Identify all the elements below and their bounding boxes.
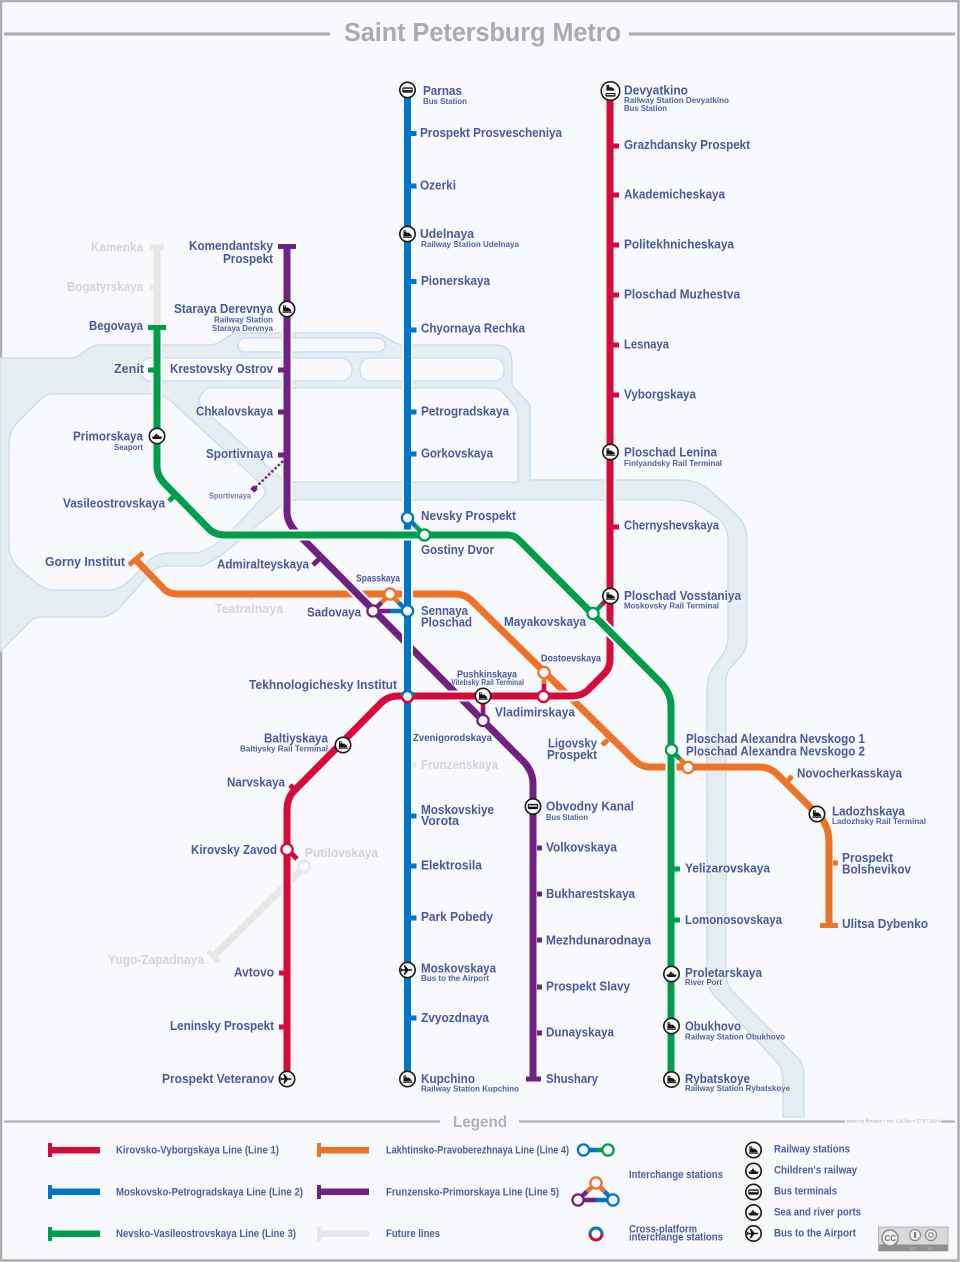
line 5 purple [252,246,542,1079]
Parnas: Parnas [423,84,462,98]
Sadovaya: Sadovaya [307,606,362,620]
line 3 green [148,328,680,1079]
creative commons badge: CC [884,1234,896,1243]
Ploschad Alexandra Nevskogo: Ploschad Alexandra Nevskogo 1 [686,732,865,746]
Moskovskiye Vorota: Moskovskiye [421,803,494,817]
Pushkinskaya: Pushkinskaya [457,670,517,680]
Prospekt Slavy: Prospekt Slavy [546,980,630,994]
Frunzenskaya: Frunzenskaya [421,758,499,772]
Zvyozdnaya: Zvyozdnaya [421,1011,490,1025]
Ligovsky Prospekt: Ligovsky [548,736,597,750]
station labels: line 5 [170,239,652,1086]
Moskovskiye Vorota: Vorota [421,814,460,828]
legend: bus to the airport: Bus to the Airport [774,1228,856,1240]
Kamenka: Kamenka [91,240,144,254]
credit: made by florstein • rev. 1.9.3en • 27.07.2024 [846,1118,941,1124]
title: Saint Petersburg Metro [344,19,621,47]
creative commons badge [878,1227,948,1251]
creative commons badge: SA [927,1246,934,1251]
Zvenigorodskaya: Zvenigorodskaya [413,733,492,744]
Gostiny Dvor: Gostiny Dvor [421,543,494,557]
Ploschad Muzhestva: Ploschad Muzhestva [624,288,741,302]
Chyornaya Rechka: Chyornaya Rechka [421,322,526,336]
Ladozhskaya: Ladozhskaya [832,804,906,818]
Obvodny Kanal [546,800,634,822]
Bukharestskaya: Bukharestskaya [546,887,636,901]
Kirovsky Zavod: Kirovsky Zavod [191,843,277,857]
Putilovskaya: Putilovskaya [305,846,379,860]
Parnas: Bus Station [423,96,467,106]
Gorkovskaya: Gorkovskaya [421,446,494,460]
Ploschad Alexandra Nevskogo: Ploschad Alexandra Nevskogo 2 [686,744,865,758]
Novocherkasskaya: Novocherkasskaya [797,766,903,780]
Obukhovo: Railway Station Obukhovo [685,1032,785,1042]
key: line 3 [48,1227,296,1241]
Sportivnaya exit: Sportivnaya [209,490,251,500]
Udelnaya: Udelnaya [420,227,475,241]
Gorny Institut: Gorny Institut [45,555,126,569]
Dostoevskaya: Dostoevskaya [541,654,601,664]
interchange connectors [373,518,688,767]
Mayakovskaya: Mayakovskaya [504,615,587,629]
Sennaya Ploschad: Sennaya [421,604,469,618]
legend: bus to the airport [746,1226,856,1241]
key: line 5: Frunzensko-Primorskaya Line (Line 5) [386,1186,559,1198]
Obukhovo [685,1020,785,1042]
Ploschad Lenina [624,446,722,468]
Vyborgskaya: Vyborgskaya [624,388,697,402]
Ulitsa Dybenko: Ulitsa Dybenko [842,917,928,931]
Tekhnologichesky Institut: Tekhnologichesky Institut [249,678,398,692]
Elektrosila: Elektrosila [421,858,483,872]
Leninsky Prospekt: Leninsky Prospekt [170,1019,275,1033]
legend: sea and river ports [746,1205,861,1220]
Pushkinskaya [451,670,524,687]
legend: interchange label: Interchange stations [629,1169,723,1181]
Obvodny Kanal: Obvodny Kanal [546,800,634,814]
Politekhnicheskaya: Politekhnicheskaya [624,238,735,252]
Baltiyskaya [240,732,329,754]
Ploschad Vosstaniya [624,589,742,610]
creative commons badge: BY [910,1246,916,1251]
station labels: line 1 [108,84,751,1086]
Ploschad Lenina: Finlyandsky Rail Terminal [624,458,722,468]
Yugo-Zapadnaya: Yugo-Zapadnaya [108,953,205,967]
Vasileostrovskaya: Vasileostrovskaya [63,496,166,510]
Park Pobedy: Park Pobedy [421,910,493,924]
legend: children's railway [746,1163,858,1179]
Volkovskaya: Volkovskaya [546,840,618,854]
Ploschad Lenina: Ploschad Lenina [624,446,718,460]
legend: children's railway: Children's railway [774,1164,858,1176]
key: line 2: Moskovsko-Petrogradskaya Line (Line 2) [116,1186,303,1198]
Ozerki: Ozerki [420,178,456,192]
line 2 blue [408,92,416,1079]
Pionerskaya: Pionerskaya [421,274,491,288]
Vladimirskaya: Vladimirskaya [495,706,576,720]
Avtovo: Avtovo [234,966,274,980]
key: line 1: Kirovsko-Vyborgskaya Line (Line 1) [116,1144,279,1156]
Devyatkino: Bus Station [624,103,667,113]
future lines [150,247,416,962]
Rybatskoye: Rybatskoye [685,1072,750,1086]
Sportivnaya: Sportivnaya [206,447,274,461]
key: line 4: Lakhtinsko-Pravoberezhnaya Line (Line 4) [386,1144,569,1156]
Grazhdansky Prospekt: Grazhdansky Prospekt [624,138,751,152]
Obukhovo: Obukhovo [685,1020,741,1034]
Ligovsky Prospekt: Prospekt [547,748,598,762]
Staraya Derevnya: Staraya Dervnya [212,323,273,333]
Zenit: Zenit [114,362,145,376]
Komendantsky Prospekt: Prospekt [223,252,274,266]
Parnas [423,84,467,106]
line 4 orange [129,553,838,926]
legend: line keys [48,1143,569,1241]
legend: cross-platform station [590,1228,602,1240]
Krestovsky Ostrov: Krestovsky Ostrov [170,362,273,376]
key: line 2 [48,1185,303,1199]
Komendantsky Prospekt: Komendantsky [189,239,273,253]
Udelnaya: Railway Station Udelnaya [421,239,519,249]
key: line 1 [48,1143,279,1157]
Chkalovskaya: Chkalovskaya [196,404,274,418]
Primorskaya: Primorskaya [73,430,144,444]
Spasskaya: Spasskaya [356,574,400,584]
legend: railway stations [746,1142,850,1158]
station labels: line 4 [45,555,928,931]
Chernyshevskaya: Chernyshevskaya [624,518,720,532]
Staraya Derevnya: Railway Station [214,314,273,324]
key: line 5 [317,1185,559,1199]
station labels: line 3 [63,240,865,1093]
key: future lines [317,1227,440,1241]
Prospekt Bolshevikov [842,851,911,876]
legend: railway stations: Railway stations [774,1144,850,1156]
Ladozhskaya: Ladozhsky Rail Terminal [832,816,926,826]
Moskovskiye Vorota [421,803,494,828]
Prospekt Prosvescheniya: Prospekt Prosvescheniya [420,126,563,140]
Prospekt Veteranov: Prospekt Veteranov [162,1072,274,1086]
Ladozhskaya [832,804,926,826]
legend: cross-platform label: Cross-platform [629,1224,697,1236]
Sennaya Ploschad: Ploschad [421,616,472,630]
line 1 red [279,92,619,1079]
Yelizarovskaya: Yelizarovskaya [685,862,771,876]
Pushkinskaya: Vitebsky Rail Terminal [451,677,524,687]
Baltiyskaya: Baltiysky Rail Terminal [240,744,328,754]
Devyatkino: Railway Station Devyatkino [624,95,729,105]
Primorskaya: Seaport [114,442,143,452]
Proletarskaya: Proletarskaya [685,966,763,980]
Shushary: Shushary [546,1072,598,1086]
Staraya Derevnya: Staraya Derevnya [174,302,274,316]
Primorskaya [73,430,144,452]
Staraya Derevnya [174,302,274,333]
legend: two-station interchange [578,1144,614,1156]
key: future lines: Future lines [386,1228,440,1240]
legend: bus terminals [746,1184,837,1200]
Akademicheskaya: Akademicheskaya [624,188,726,202]
Moskovskaya [421,962,497,983]
Proletarskaya [685,966,763,987]
station labels: line 2 [413,84,563,1094]
legend: bus terminals: Bus terminals [774,1186,837,1198]
Admiralteyskaya: Admiralteyskaya [217,558,310,572]
Narvskaya: Narvskaya [227,776,286,790]
Baltiyskaya: Baltiyskaya [264,732,329,746]
Petrogradskaya: Petrogradskaya [421,404,510,418]
Ligovsky Prospekt [547,736,598,762]
Komendantsky Prospekt [189,239,274,266]
Ploschad Vosstaniya: Moskovsky Rail Terminal [624,600,719,610]
Kupchino: Railway Station Kupchino [421,1084,519,1094]
station markers [149,82,825,1087]
key: line 4 [317,1143,569,1157]
Udelnaya [420,227,519,249]
Lesnaya: Lesnaya [624,338,670,352]
Prospekt Bolshevikov: Bolshevikov [842,862,911,876]
Devyatkino: Devyatkino [624,84,688,98]
legend: sea and river ports: Sea and river ports [774,1206,861,1218]
Mezhdunarodnaya: Mezhdunarodnaya [546,934,652,948]
title rule right [629,32,955,36]
Lomonosovskaya: Lomonosovskaya [685,913,783,927]
map: water and islands [0,333,804,1117]
Kupchino [421,1072,519,1094]
Teatralnaya: Teatralnaya [215,602,284,616]
Begovaya: Begovaya [89,319,144,333]
Bogatyrskaya: Bogatyrskaya [67,280,144,294]
Dunayskaya: Dunayskaya [546,1026,615,1040]
Devyatkino [624,84,729,113]
Sennaya Ploschad [421,604,472,630]
Proletarskaya: River Port [685,977,722,987]
Prospekt Bolshevikov: Prospekt [842,851,894,865]
Nevsky Prospekt: Nevsky Prospekt [421,509,517,523]
legend: cross-platform label [629,1224,723,1244]
Kupchino: Kupchino [421,1072,475,1086]
legend: three-station interchange [572,1177,619,1206]
legend: cross-platform label: interchange stations [629,1232,723,1244]
Ploschad Vosstaniya: Ploschad Vosstaniya [624,589,742,603]
Rybatskoye [685,1072,790,1093]
Moskovskaya: Moskovskaya [421,962,497,976]
key: line 3: Nevsko-Vasileostrovskaya Line (Line 3) [116,1228,296,1240]
Obvodny Kanal: Bus Station [546,812,588,822]
legend heading: Legend [453,1114,507,1131]
Moskovskaya: Bus to the Airport [421,973,489,983]
Ploschad Alexandra Nevskogo [686,732,865,758]
title rule left [4,32,330,36]
legend heading rules [4,1120,955,1122]
Rybatskoye: Railway Station Rybatskoye [685,1083,790,1093]
